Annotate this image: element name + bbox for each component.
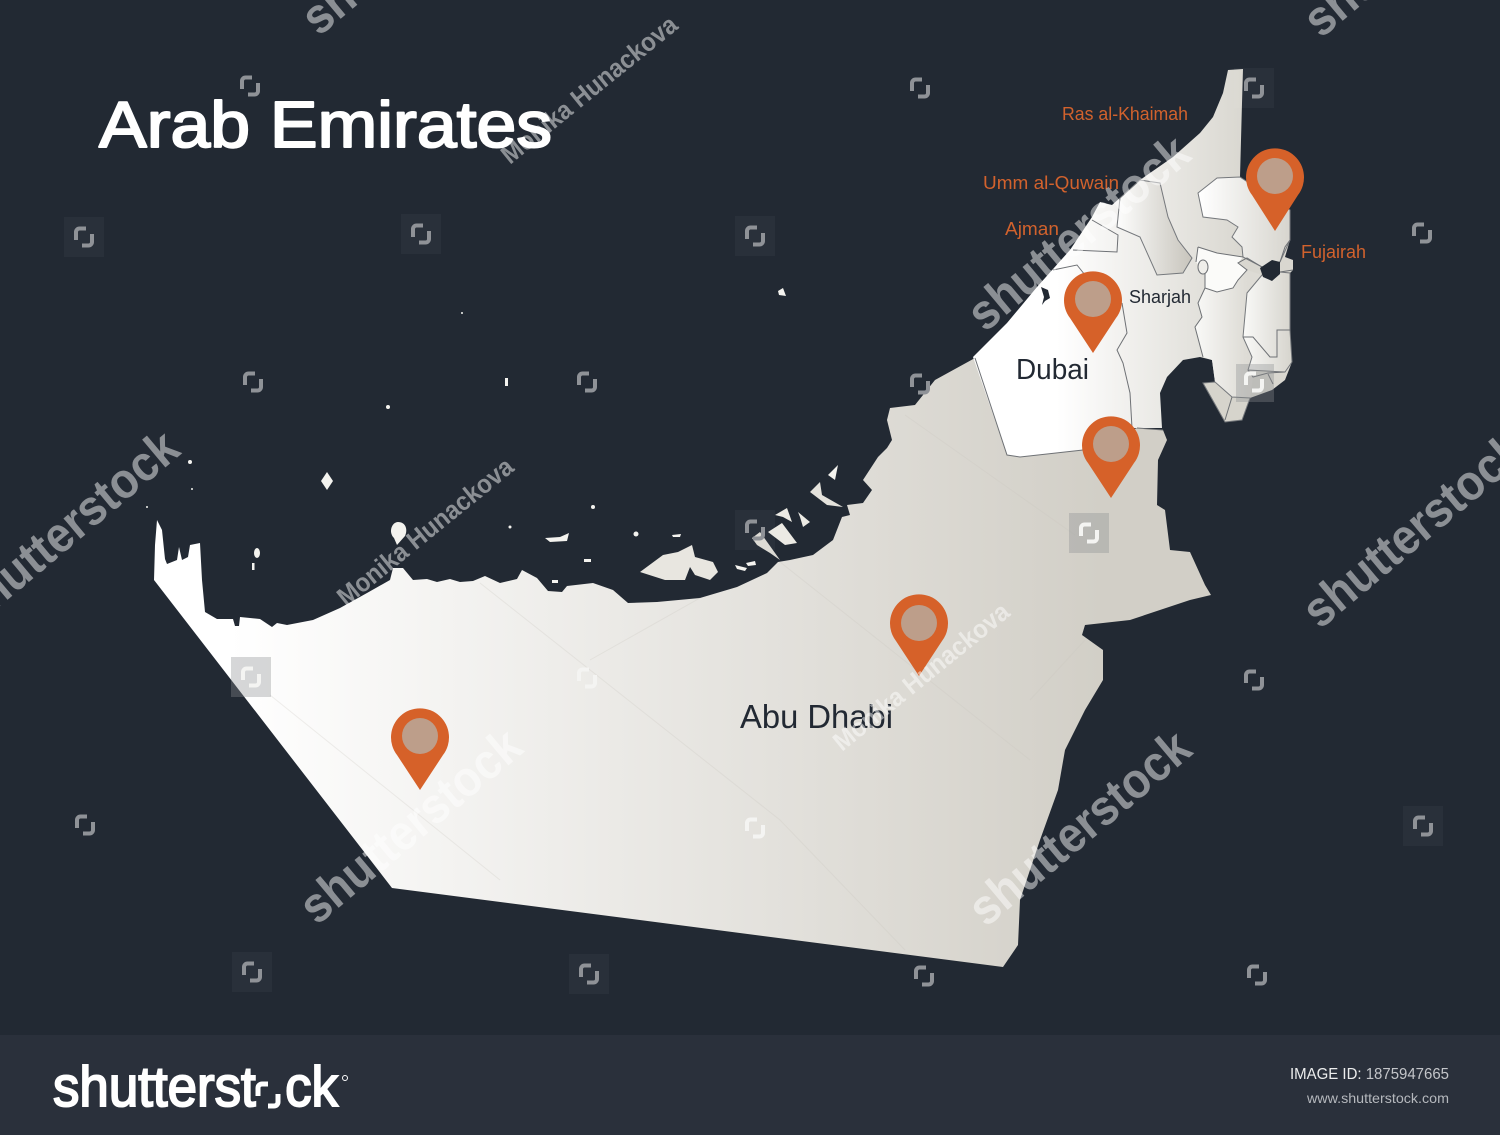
emirate border lines — [975, 220, 1293, 457]
pin: western Abu Dhabi — [391, 708, 449, 790]
watermark text: shutterstock — [956, 124, 1201, 341]
region: Abu Dhabi — [154, 358, 1211, 967]
label: Fujairah: Fujairah — [1301, 242, 1366, 262]
watermark icons — [64, 68, 1443, 994]
region: northern emirates base — [973, 69, 1293, 457]
region: southern peninsula — [1203, 382, 1250, 422]
faint diagonal lines on map — [270, 415, 1085, 950]
enclave and creek — [1041, 260, 1280, 305]
offshore islands — [146, 288, 843, 583]
map: United Arab Emirates — [146, 69, 1293, 967]
region: Umm al-Quwain — [1117, 180, 1192, 275]
watermark text: shutterstock — [957, 719, 1202, 936]
footer bar — [0, 1035, 1500, 1135]
pin: Fujairah — [1246, 148, 1304, 231]
label: Umm al-Quwain: Umm al-Quwain — [983, 173, 1119, 193]
footer logo: shutterstock: shutterstock — [53, 1055, 338, 1119]
watermark text: Monika Hunackova — [827, 596, 1016, 757]
pin: central Abu Dhabi — [890, 594, 948, 676]
footer image id: IMAGE ID: 1875947665 — [1290, 1066, 1449, 1083]
footer website: www.shutterstock.com — [1306, 1090, 1449, 1106]
title: Arab Emirates — [99, 88, 552, 161]
label: Ajman: Ajman — [1005, 219, 1059, 239]
watermark text: shutterstock — [288, 717, 533, 934]
region: eastern Sharjah — [1195, 270, 1262, 398]
region: Fujairah east — [1243, 272, 1292, 372]
label: Sharjah: Sharjah — [1129, 287, 1191, 307]
label: Ras al-Khaimah: Ras al-Khaimah — [1062, 104, 1188, 124]
region: Fujairah north — [1198, 177, 1290, 267]
watermark text: Monika Hunackova — [331, 451, 520, 612]
label: Dubai: Dubai — [1016, 354, 1089, 386]
watermark text: Monika Hunackova — [495, 9, 684, 170]
region: central enclave — [1196, 247, 1247, 292]
pin: Dubai — [1064, 271, 1122, 353]
pin: Al Ain border — [1082, 416, 1140, 498]
label: Abu Dhabi: Abu Dhabi — [740, 698, 893, 735]
